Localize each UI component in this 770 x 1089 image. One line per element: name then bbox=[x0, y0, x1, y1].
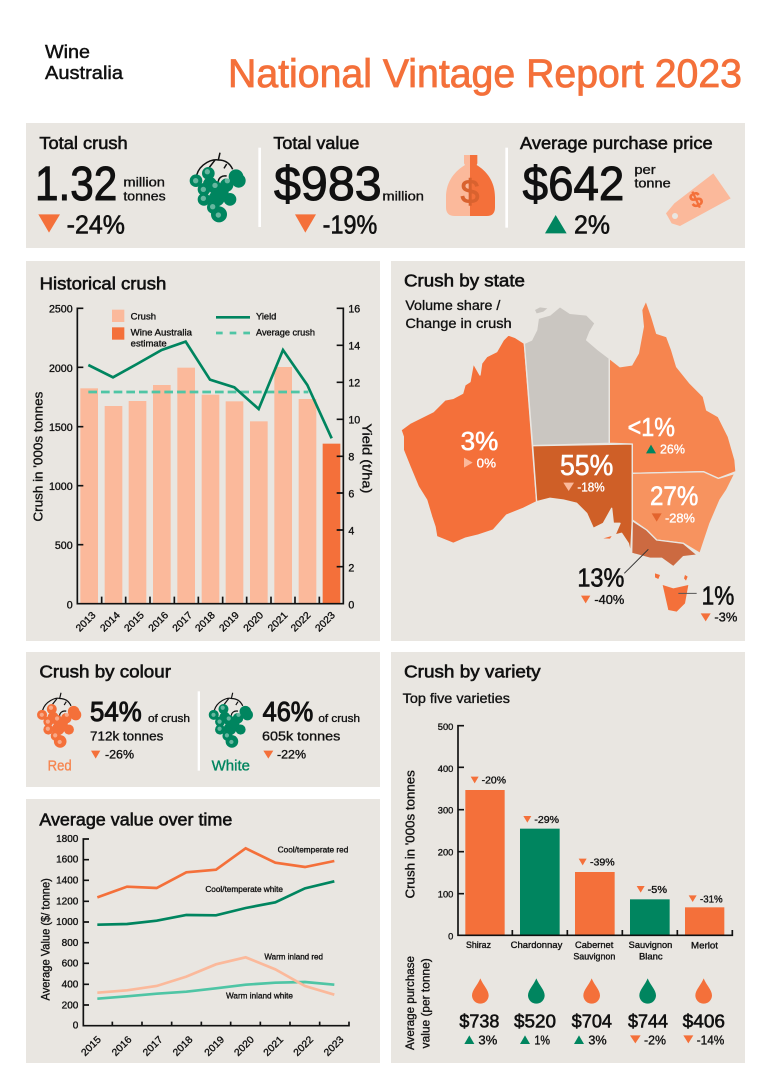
left axis labels: 1500 bbox=[49, 422, 73, 434]
y axis labels: 400 bbox=[438, 764, 453, 774]
left axis labels: 2500 bbox=[49, 303, 73, 315]
purchase price changes: 1% bbox=[534, 1033, 550, 1047]
legend: Crush bbox=[131, 311, 156, 321]
label: WA bbox=[461, 426, 498, 470]
x axis labels bbox=[79, 1034, 347, 1059]
subheading: Change in crush bbox=[405, 316, 512, 331]
bar change labels: -29% bbox=[534, 815, 559, 826]
line chart bbox=[97, 848, 334, 999]
axes bbox=[77, 308, 343, 604]
stat: red: Red bbox=[48, 759, 72, 775]
line labels: Warm inland white bbox=[226, 990, 293, 1000]
y axis labels: 1800 bbox=[56, 834, 79, 845]
title: National Vintage Report 2023 bbox=[228, 52, 742, 96]
stat: white: 46% bbox=[263, 696, 313, 727]
x axis labels: 2019 bbox=[217, 610, 242, 634]
label: VIC: 13% bbox=[577, 563, 624, 593]
x axis labels: 2022 bbox=[292, 1034, 316, 1059]
purchase prices: $406 bbox=[683, 1010, 725, 1031]
stat: total crush: Total crush bbox=[39, 133, 128, 153]
axes bbox=[458, 726, 732, 935]
label: TAS: 1% bbox=[702, 580, 734, 610]
right axis labels: 6 bbox=[348, 488, 354, 500]
subheading bbox=[405, 298, 512, 331]
label: NSW bbox=[650, 481, 698, 525]
purchase price changes: -14% bbox=[697, 1033, 724, 1047]
x axis labels: 2016 bbox=[110, 1034, 135, 1059]
y axis labels: 1200 bbox=[56, 896, 79, 907]
legend: Yield bbox=[256, 312, 276, 322]
stat: total value: $983 bbox=[274, 157, 382, 211]
icon: red grapes bbox=[37, 693, 81, 748]
label: WA: 3% bbox=[461, 426, 498, 456]
panel: crush by state bbox=[391, 261, 745, 641]
yield line bbox=[88, 342, 332, 438]
logo: Wine Australia: Wine bbox=[45, 42, 90, 62]
average crush line bbox=[88, 388, 308, 396]
right axis labels: 0 bbox=[348, 599, 354, 611]
x axis labels: 2022 bbox=[289, 610, 314, 634]
axis title: purchase value: Average purchase bbox=[404, 956, 417, 1050]
stat: white: 605k tonnes bbox=[262, 728, 341, 743]
heading: Crush by variety bbox=[404, 662, 541, 682]
purchase prices: $520 bbox=[514, 1010, 556, 1031]
x axis labels: 2021 bbox=[262, 1034, 286, 1059]
right axis labels: 12 bbox=[348, 378, 360, 390]
right axis labels: 8 bbox=[348, 452, 354, 464]
purchase price changes: 3% bbox=[478, 1033, 497, 1047]
y axis labels: 300 bbox=[438, 806, 453, 816]
logo: Wine Australia: Australia bbox=[45, 63, 124, 83]
right axis labels: 16 bbox=[348, 303, 360, 315]
right axis labels: 2 bbox=[348, 562, 354, 574]
stat: average purchase price: Average purchase price bbox=[520, 133, 713, 153]
y axis labels bbox=[56, 834, 79, 1031]
stat: average purchase price: per bbox=[634, 162, 656, 177]
stat: total crush: -24% bbox=[67, 209, 125, 239]
stat: white: White bbox=[212, 759, 250, 775]
icons: wine drops bbox=[472, 978, 712, 1004]
stat: total value: Total value bbox=[273, 133, 359, 153]
purchase price changes: 3% bbox=[588, 1033, 607, 1047]
variety labels bbox=[466, 940, 718, 961]
legend bbox=[112, 310, 315, 348]
y axis labels: 0 bbox=[73, 1020, 79, 1031]
stat: red: -26% bbox=[105, 748, 134, 762]
stat: average purchase price: $642 bbox=[523, 157, 624, 211]
stat: red: of crush bbox=[148, 713, 190, 725]
y axis labels bbox=[438, 722, 453, 942]
purchase prices bbox=[459, 1010, 725, 1031]
x axis labels: 2020 bbox=[232, 1034, 257, 1059]
y axis labels: 100 bbox=[438, 890, 453, 900]
x axis labels: 2017 bbox=[171, 610, 195, 634]
subheading: Top five varieties bbox=[403, 691, 510, 706]
variety labels: Sauvignon bbox=[573, 951, 615, 961]
bar change labels: -20% bbox=[482, 776, 506, 787]
label: VIC bbox=[577, 549, 648, 607]
y axis labels: 200 bbox=[62, 1000, 79, 1011]
stat: red bbox=[48, 696, 190, 775]
stat: red: 54% bbox=[90, 696, 142, 727]
legend: Wine Australia bbox=[131, 327, 193, 337]
panel: historical crush bbox=[26, 261, 380, 641]
left axis labels bbox=[49, 303, 73, 611]
variety labels: Blanc bbox=[639, 951, 663, 961]
y axis labels: 0 bbox=[448, 932, 453, 942]
heading: Crush by colour bbox=[39, 662, 171, 682]
axis title: purchase value: value (per tonne) bbox=[419, 958, 432, 1048]
right axis labels: 4 bbox=[348, 525, 354, 537]
x axis labels: 2013 bbox=[74, 610, 99, 634]
stat: total crush bbox=[35, 133, 166, 239]
x axis labels: 2014 bbox=[98, 610, 123, 634]
y axis labels: 800 bbox=[62, 938, 79, 949]
bar change labels: -31% bbox=[700, 894, 723, 905]
variety labels: Sauvignon bbox=[629, 940, 672, 950]
y axis labels: 500 bbox=[438, 722, 453, 732]
label: QLD bbox=[628, 412, 685, 456]
bar change labels bbox=[471, 776, 723, 905]
stat: average purchase price: tonne bbox=[634, 176, 671, 191]
x axis labels: 2015 bbox=[122, 610, 147, 634]
stat: total crush: million bbox=[123, 175, 165, 190]
axis title: yield: Yield (t/ha) bbox=[359, 423, 374, 493]
line labels: Cool/temperate white bbox=[205, 884, 283, 894]
legend: Average crush bbox=[256, 327, 315, 337]
icon: grapes bbox=[190, 153, 246, 222]
right axis labels bbox=[348, 303, 360, 611]
label: QLD: 26% bbox=[660, 442, 685, 456]
stat: total crush: tonnes bbox=[123, 189, 166, 204]
stat: average purchase price bbox=[520, 133, 713, 239]
heading: Crush by state bbox=[404, 271, 525, 291]
right axis labels: 14 bbox=[348, 341, 360, 353]
map of Australia bbox=[401, 301, 736, 612]
stat: total value: million bbox=[382, 189, 424, 204]
stat: total value: -19% bbox=[323, 209, 377, 239]
panel: average value over time bbox=[26, 799, 380, 1063]
line labels bbox=[205, 844, 348, 1000]
heading: Historical crush bbox=[40, 273, 166, 293]
purchase price changes: -2% bbox=[644, 1033, 666, 1047]
label: TAS: -3% bbox=[714, 611, 737, 625]
label: VIC: -40% bbox=[594, 593, 624, 607]
axis title: crush: Crush in '000s tonnes bbox=[31, 391, 46, 522]
y axis labels: 1600 bbox=[56, 855, 79, 866]
right axis labels: 10 bbox=[348, 415, 360, 427]
x axis labels: 2023 bbox=[322, 1034, 347, 1059]
label: SA: 55% bbox=[560, 450, 613, 482]
stat: total value bbox=[273, 133, 424, 239]
variety labels: Shiraz bbox=[466, 940, 491, 950]
axis title: purchase value bbox=[404, 956, 432, 1050]
x axis labels: 2021 bbox=[266, 610, 291, 634]
left axis labels: 2000 bbox=[49, 363, 73, 375]
label: NSW: 27% bbox=[650, 481, 698, 511]
y axis labels: 1400 bbox=[56, 875, 79, 886]
stat: red: 712k tonnes bbox=[90, 728, 164, 743]
icon: price tag: $ bbox=[686, 187, 707, 213]
label: TAS bbox=[678, 580, 737, 625]
x axis labels: 2020 bbox=[242, 610, 266, 634]
x axis labels: 2017 bbox=[141, 1034, 166, 1059]
bar change labels: -39% bbox=[590, 858, 615, 869]
purchase prices: $738 bbox=[459, 1010, 499, 1031]
bar chart: varieties bbox=[465, 790, 724, 935]
label: WA: 0% bbox=[477, 456, 496, 470]
bar change labels: -5% bbox=[648, 885, 667, 896]
icon: money bag: $ bbox=[461, 174, 479, 211]
label: SA bbox=[560, 450, 613, 494]
variety labels: Cabernet bbox=[575, 940, 614, 950]
bar chart: crush bbox=[80, 367, 340, 604]
x axis labels: 2015 bbox=[79, 1034, 104, 1059]
y axis labels: 200 bbox=[438, 848, 453, 858]
icon: white grapes bbox=[209, 693, 253, 748]
subheading: Volume share / bbox=[405, 298, 501, 313]
left axis labels: 0 bbox=[67, 599, 73, 611]
stat: white: -22% bbox=[277, 748, 306, 762]
line labels: Warm inland red bbox=[264, 952, 323, 962]
stat: average purchase price: 2% bbox=[574, 209, 610, 239]
variety labels: Merlot bbox=[691, 941, 718, 951]
panel: crush by colour bbox=[26, 652, 380, 787]
stat: white bbox=[212, 696, 360, 775]
variety labels: Chardonnay bbox=[511, 940, 563, 950]
y axis labels: 1000 bbox=[56, 917, 79, 928]
x axis labels: 2018 bbox=[171, 1034, 196, 1059]
label: QLD: <1% bbox=[628, 412, 675, 442]
stat: total crush: 1.32 bbox=[35, 157, 117, 211]
x axis labels: 2018 bbox=[193, 610, 218, 634]
y axis labels: 600 bbox=[62, 959, 79, 970]
y axis labels: 400 bbox=[62, 979, 79, 990]
purchase prices: $744 bbox=[628, 1010, 668, 1031]
label: NSW: -28% bbox=[665, 511, 695, 525]
x axis labels bbox=[74, 610, 338, 634]
purchase price changes bbox=[464, 1033, 724, 1047]
panel: headline figures bbox=[26, 123, 745, 248]
x axis labels: 2016 bbox=[147, 610, 171, 634]
legend: estimate bbox=[131, 338, 167, 348]
heading: Average value over time bbox=[39, 810, 233, 830]
icon: money bag bbox=[446, 155, 495, 216]
axis title: Average Value ($/ tonne) bbox=[39, 878, 52, 1000]
line labels: Cool/temperate red bbox=[278, 844, 348, 854]
left axis labels: 1000 bbox=[49, 481, 73, 493]
left axis labels: 500 bbox=[55, 540, 73, 552]
icon: price tag bbox=[666, 173, 731, 226]
label: SA: -18% bbox=[577, 480, 605, 494]
axis title: Crush in '000s tonnes bbox=[404, 770, 418, 898]
logo: Wine Australia bbox=[45, 42, 124, 83]
purchase prices: $704 bbox=[572, 1010, 612, 1031]
panel: crush by variety bbox=[391, 652, 745, 1063]
stat: white: of crush bbox=[318, 713, 360, 725]
x axis labels: 2023 bbox=[313, 610, 338, 634]
x axis labels: 2019 bbox=[203, 1034, 227, 1059]
axes bbox=[83, 839, 349, 1026]
